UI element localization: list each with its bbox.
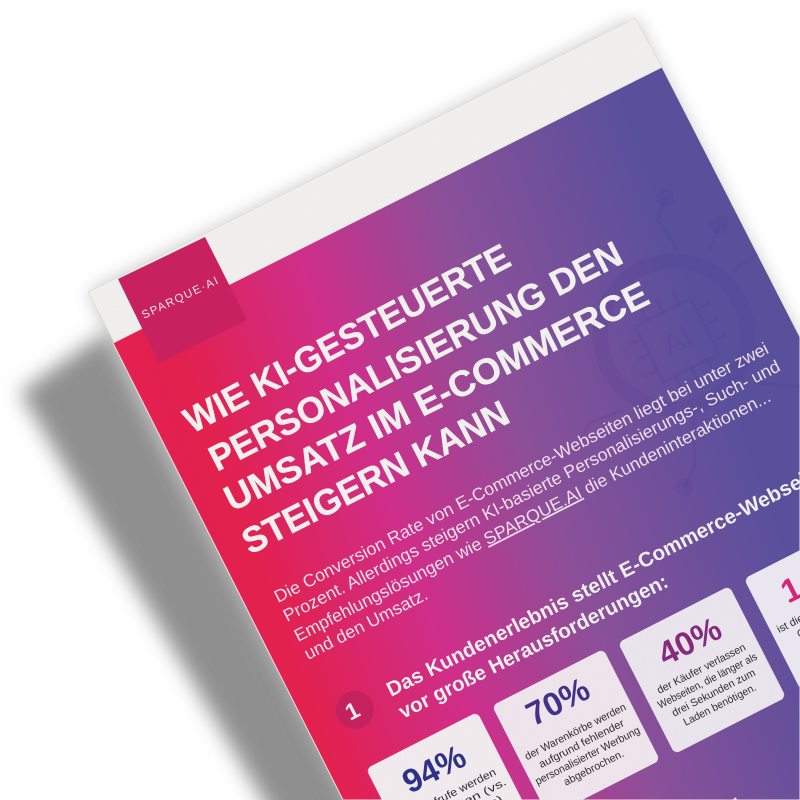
logo: SPARQUE.AI square: SPARQUE·AI <box>140 275 220 322</box>
heading: section 1: vor große Herausforderungen: <box>395 570 672 723</box>
title <box>177 233 655 562</box>
badge: section number 1: 1 <box>341 696 364 725</box>
title: PERSONALISIERUNG DEN <box>202 233 629 479</box>
title: WIE KI-GESTEUERTE <box>177 236 517 441</box>
card: 94%: 94% <box>396 737 472 800</box>
card: 70%: 70% <box>520 670 595 733</box>
text block: introduction: und den Umsatz. <box>301 584 431 664</box>
card: 40%: Laden benötigen. <box>682 682 758 729</box>
card: 70%: aufgrund fehlender <box>537 717 627 771</box>
card: 70% <box>492 649 660 800</box>
text block: introduction: Prozent. Allerdings steigern KI-basierte Personalisierungs-, Such- und <box>280 356 783 626</box>
card: 70%: abgebrochen. <box>562 748 626 789</box>
title: STEIGERN KANN <box>235 392 516 562</box>
card: 70%: der Warenkörbe werden <box>523 701 628 763</box>
card: 40%: 40% <box>652 610 727 673</box>
title: UMSATZ IM E-COMMERCE <box>217 273 655 519</box>
card: 40%: Webseiten, die länger als <box>656 651 760 711</box>
card: 94% <box>366 712 534 800</box>
card: 1.8% <box>744 522 800 690</box>
card: 70%: personalisierter Werbung <box>533 724 642 788</box>
badge: section number 1 <box>336 691 374 729</box>
paper: white top band <box>88 18 664 346</box>
logo: SPARQUE.AI square <box>118 237 247 363</box>
text block: introduction: Die Conversion Rate von E-Commerce-Webseiten liegt bei unter zwei <box>271 338 772 607</box>
icon: AI chip watermark <box>640 199 800 488</box>
card: 40%: drei Sekunden zum <box>670 667 758 719</box>
panel: gradient poster background <box>113 67 800 800</box>
text block: introduction: Empfehlungslösungen wie SPARQUE.AI die Kundeninteraktionen... <box>291 386 774 646</box>
card: 40% <box>618 586 786 754</box>
icon: AI chip watermark: AI <box>658 320 698 362</box>
card: 40%: der Käufer verlassen <box>655 642 748 697</box>
